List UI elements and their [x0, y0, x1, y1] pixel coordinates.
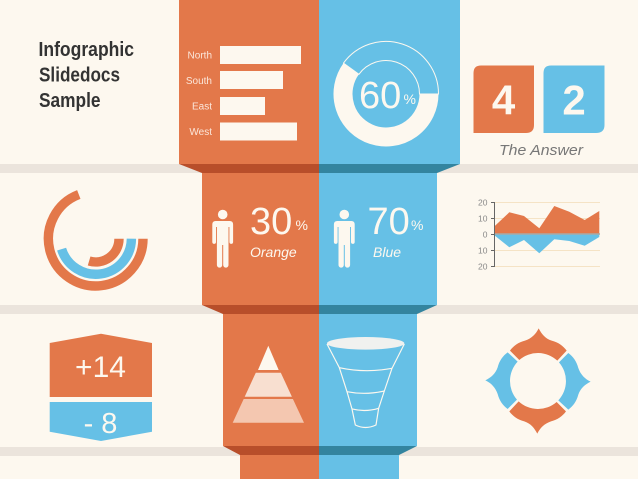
donut chart: 60 percent: 60	[359, 75, 401, 117]
area chart: 20	[478, 198, 488, 208]
panel: top ribbon blue	[319, 0, 460, 173]
donut chart: 60 percent: %	[404, 91, 416, 107]
area chart: 0	[483, 230, 488, 240]
pyramid chart	[233, 346, 304, 423]
life ring diagram	[485, 328, 591, 434]
area chart: 20	[478, 262, 488, 272]
icon: person	[334, 210, 355, 268]
badge: plus 14 minus 8	[50, 334, 152, 441]
bar chart: regions	[186, 46, 301, 140]
stat: 30 percent orange: 30	[250, 201, 292, 243]
stat: 70 percent blue	[334, 201, 423, 268]
funnel chart	[327, 337, 404, 427]
answer cards: 4 and 2: 2	[562, 76, 586, 124]
panel: middle ribbon orange	[202, 173, 319, 314]
bar chart: regions: East	[192, 102, 212, 112]
panel: middle ribbon blue	[319, 173, 437, 314]
area chart: 10	[478, 246, 488, 256]
title: Infographic	[38, 38, 134, 61]
badge: plus 14 minus 8: - 8	[84, 408, 117, 440]
stat: 30 percent orange: %	[296, 217, 308, 233]
stat: 70 percent blue: %	[411, 217, 423, 233]
bar chart: regions: West	[189, 127, 212, 138]
donut chart: 60 percent	[343, 41, 439, 137]
title: Slidedocs	[39, 64, 120, 86]
icon: person	[212, 210, 233, 268]
title	[38, 38, 134, 112]
answer cards: 4 and 2: The Answer	[499, 142, 584, 159]
panel: lower ribbon blue	[319, 314, 417, 479]
panel: top ribbon orange	[179, 0, 319, 173]
area chart	[478, 198, 600, 272]
stat: 70 percent blue: 70	[368, 201, 410, 243]
stat: 30 percent orange	[212, 201, 308, 268]
stat: 30 percent orange: Orange	[250, 244, 297, 260]
badge: plus 14 minus 8: +14	[75, 351, 126, 384]
title: Sample	[39, 89, 100, 112]
panel: lower ribbon orange	[223, 314, 319, 479]
bar chart: regions: South	[186, 76, 212, 87]
area chart: 10	[478, 214, 488, 224]
bar chart: regions: North	[188, 50, 212, 62]
concentric arc chart	[48, 194, 143, 286]
answer cards: 4 and 2: 4	[492, 76, 516, 124]
answer cards: 4 and 2	[474, 66, 604, 159]
stat: 70 percent blue: Blue	[373, 244, 401, 260]
